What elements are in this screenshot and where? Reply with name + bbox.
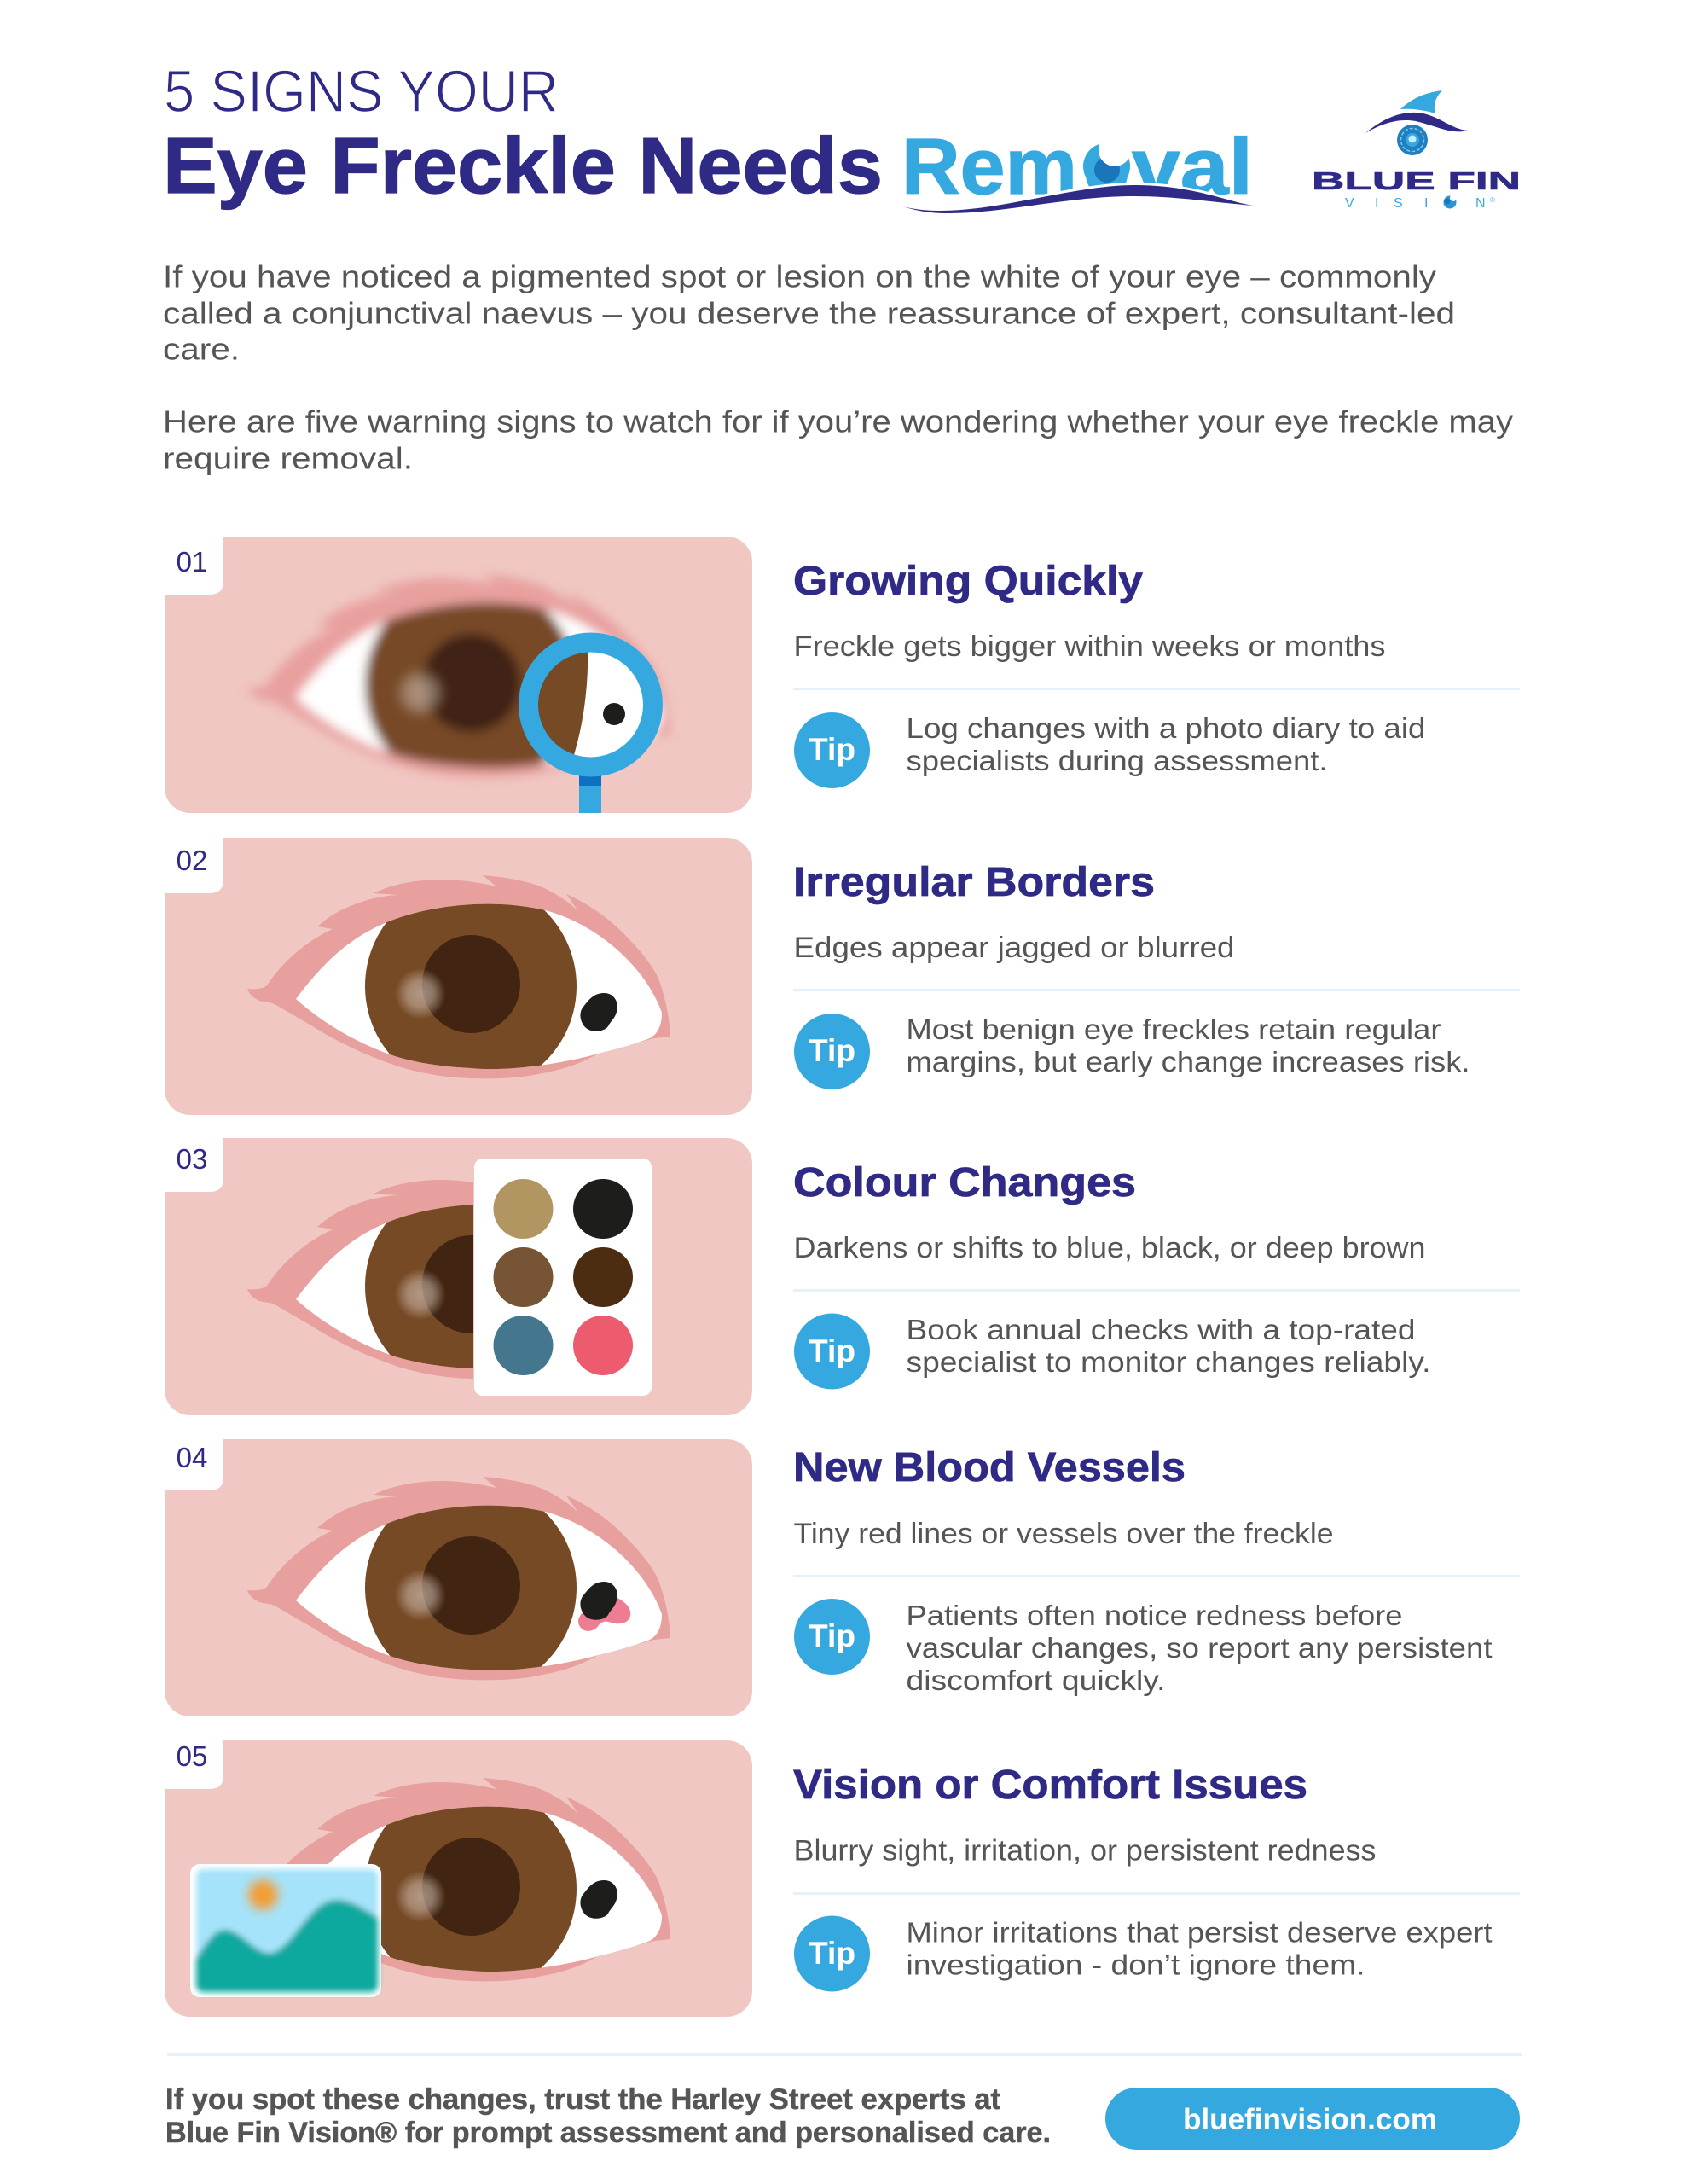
footer call to action text [165,2083,1051,2149]
intro paragraph 1 [163,259,1455,367]
sign 1 text [793,559,1520,788]
intro paragraph 1: If you have noticed a pigmented spot or lesion on the white of your eye – commonly [163,259,1436,293]
tip text: vascular changes, so report any persistent [906,1632,1493,1664]
eye with jagged freckle [247,875,670,1092]
description: Tiny red lines or vessels over the freckle [793,1518,1334,1550]
title: eye freckle needs: Eye Freckle Needs [163,121,883,210]
intro paragraph 1: care. [163,331,240,367]
eye, hidden behind the card [247,1180,473,1379]
tip text [906,1916,1493,1981]
tip text [906,1600,1493,1696]
eye with red vessels under freckle [247,1477,670,1693]
tip text: Minor irritations that persist deserve expert [906,1916,1493,1949]
blurred landscape photo [188,1864,388,2001]
tip text [906,1014,1470,1077]
tip badge: Tip [809,1618,855,1653]
tip badge [794,1014,870,1089]
heading: Growing Quickly [793,559,1143,604]
tip badge [794,712,870,788]
tip badge [794,1314,870,1389]
heading: Vision or Comfort Issues [793,1763,1307,1808]
tip text: investigation - don’t ignore them. [906,1949,1365,1981]
tip text: specialists during assessment. [906,745,1327,776]
footer call to action text: If you spot these changes, trust the Harley Street experts at [165,2083,1000,2116]
tip badge: Tip [809,1033,855,1068]
description: Darkens or shifts to blue, black, or deep brown [793,1232,1426,1264]
tip text: Log changes with a photo diary to aid [906,712,1426,744]
infographic [164,70,1522,2150]
tip text: discomfort quickly. [906,1664,1165,1696]
number tab 01 [164,536,223,595]
footer call to action text: Blue Fin Vision® for prompt assessment and personalised care. [165,2117,1051,2149]
logo: Blue Fin Vision [1312,90,1521,211]
title: 5 signs your: 5 SIGNS YOUR [164,58,559,125]
tip text: Patients often notice redness before [906,1600,1402,1631]
title: removal wordmark with eye and wave: o [1083,122,1130,211]
logo: Blue Fin Vision: VISION [1345,196,1486,211]
number tab 05 [164,1740,223,1789]
number tab 05: 05 [177,1740,207,1772]
logo: Blue Fin Vision: ® [1490,196,1495,204]
tip badge [794,1599,870,1675]
heading: Irregular Borders [793,860,1155,905]
number tab 02 [164,837,223,893]
intro paragraph 2 [163,404,1513,476]
blurred eye [247,574,670,791]
sign 4 text [793,1445,1520,1696]
heading: New Blood Vessels [793,1445,1186,1490]
tip text: Most benign eye freckles retain regular [906,1014,1441,1045]
sign 2 text [793,860,1520,1089]
title: removal wordmark with eye and wave: Rem [901,122,1077,211]
tip text [906,712,1426,776]
number tab 02: 02 [177,845,207,876]
intro paragraph 2: require removal. [163,440,413,476]
number tab 04 [164,1438,223,1490]
tip text: Book annual checks with a top-rated [906,1314,1416,1345]
panel 02: irregular borders illustration [164,837,752,1115]
sign 3 text [793,1160,1520,1389]
logo: Blue Fin Vision: BLUE FIN [1312,168,1521,195]
panel 05: vision or comfort illustration [164,1740,752,2017]
tip text: specialist to monitor changes reliably. [906,1346,1431,1378]
number tab 01: 01 [177,546,207,578]
title: removal wordmark with eye and wave: val [1132,122,1253,211]
icon: magnifying glass [529,642,653,813]
website button: bluefinvision.com [1183,2103,1437,2136]
tip text [906,1314,1431,1378]
description: Blurry sight, irritation, or persistent redness [793,1834,1377,1867]
title: removal wordmark with eye and wave [901,122,1254,213]
tip badge: Tip [809,1333,855,1368]
sign 5 text [793,1763,1520,1991]
tip badge: Tip [809,732,855,767]
tip text: margins, but early change increases risk. [906,1046,1470,1077]
eye with freckle [247,1778,670,1995]
description: Edges appear jagged or blurred [793,932,1235,964]
colour swatch card [474,1159,652,1396]
number tab 04: 04 [177,1442,207,1473]
panel 03: colour changes illustration [164,1137,752,1415]
heading: Colour Changes [793,1160,1136,1205]
intro paragraph 1: called a conjunctival naevus – you deserve the reassurance of expert, consultant-led [163,295,1455,331]
panel 04: new blood vessels illustration [164,1438,752,1716]
description: Freckle gets bigger within weeks or months [793,630,1385,663]
intro paragraph 2: Here are five warning signs to watch for if you’re wondering whether your eye freckle may [163,404,1513,439]
website button [1105,2088,1520,2150]
number tab 03 [164,1137,223,1192]
number tab 03: 03 [177,1143,207,1175]
panel 01: growing quickly illustration [164,536,752,813]
tip badge [794,1916,870,1991]
tip badge: Tip [809,1936,855,1971]
